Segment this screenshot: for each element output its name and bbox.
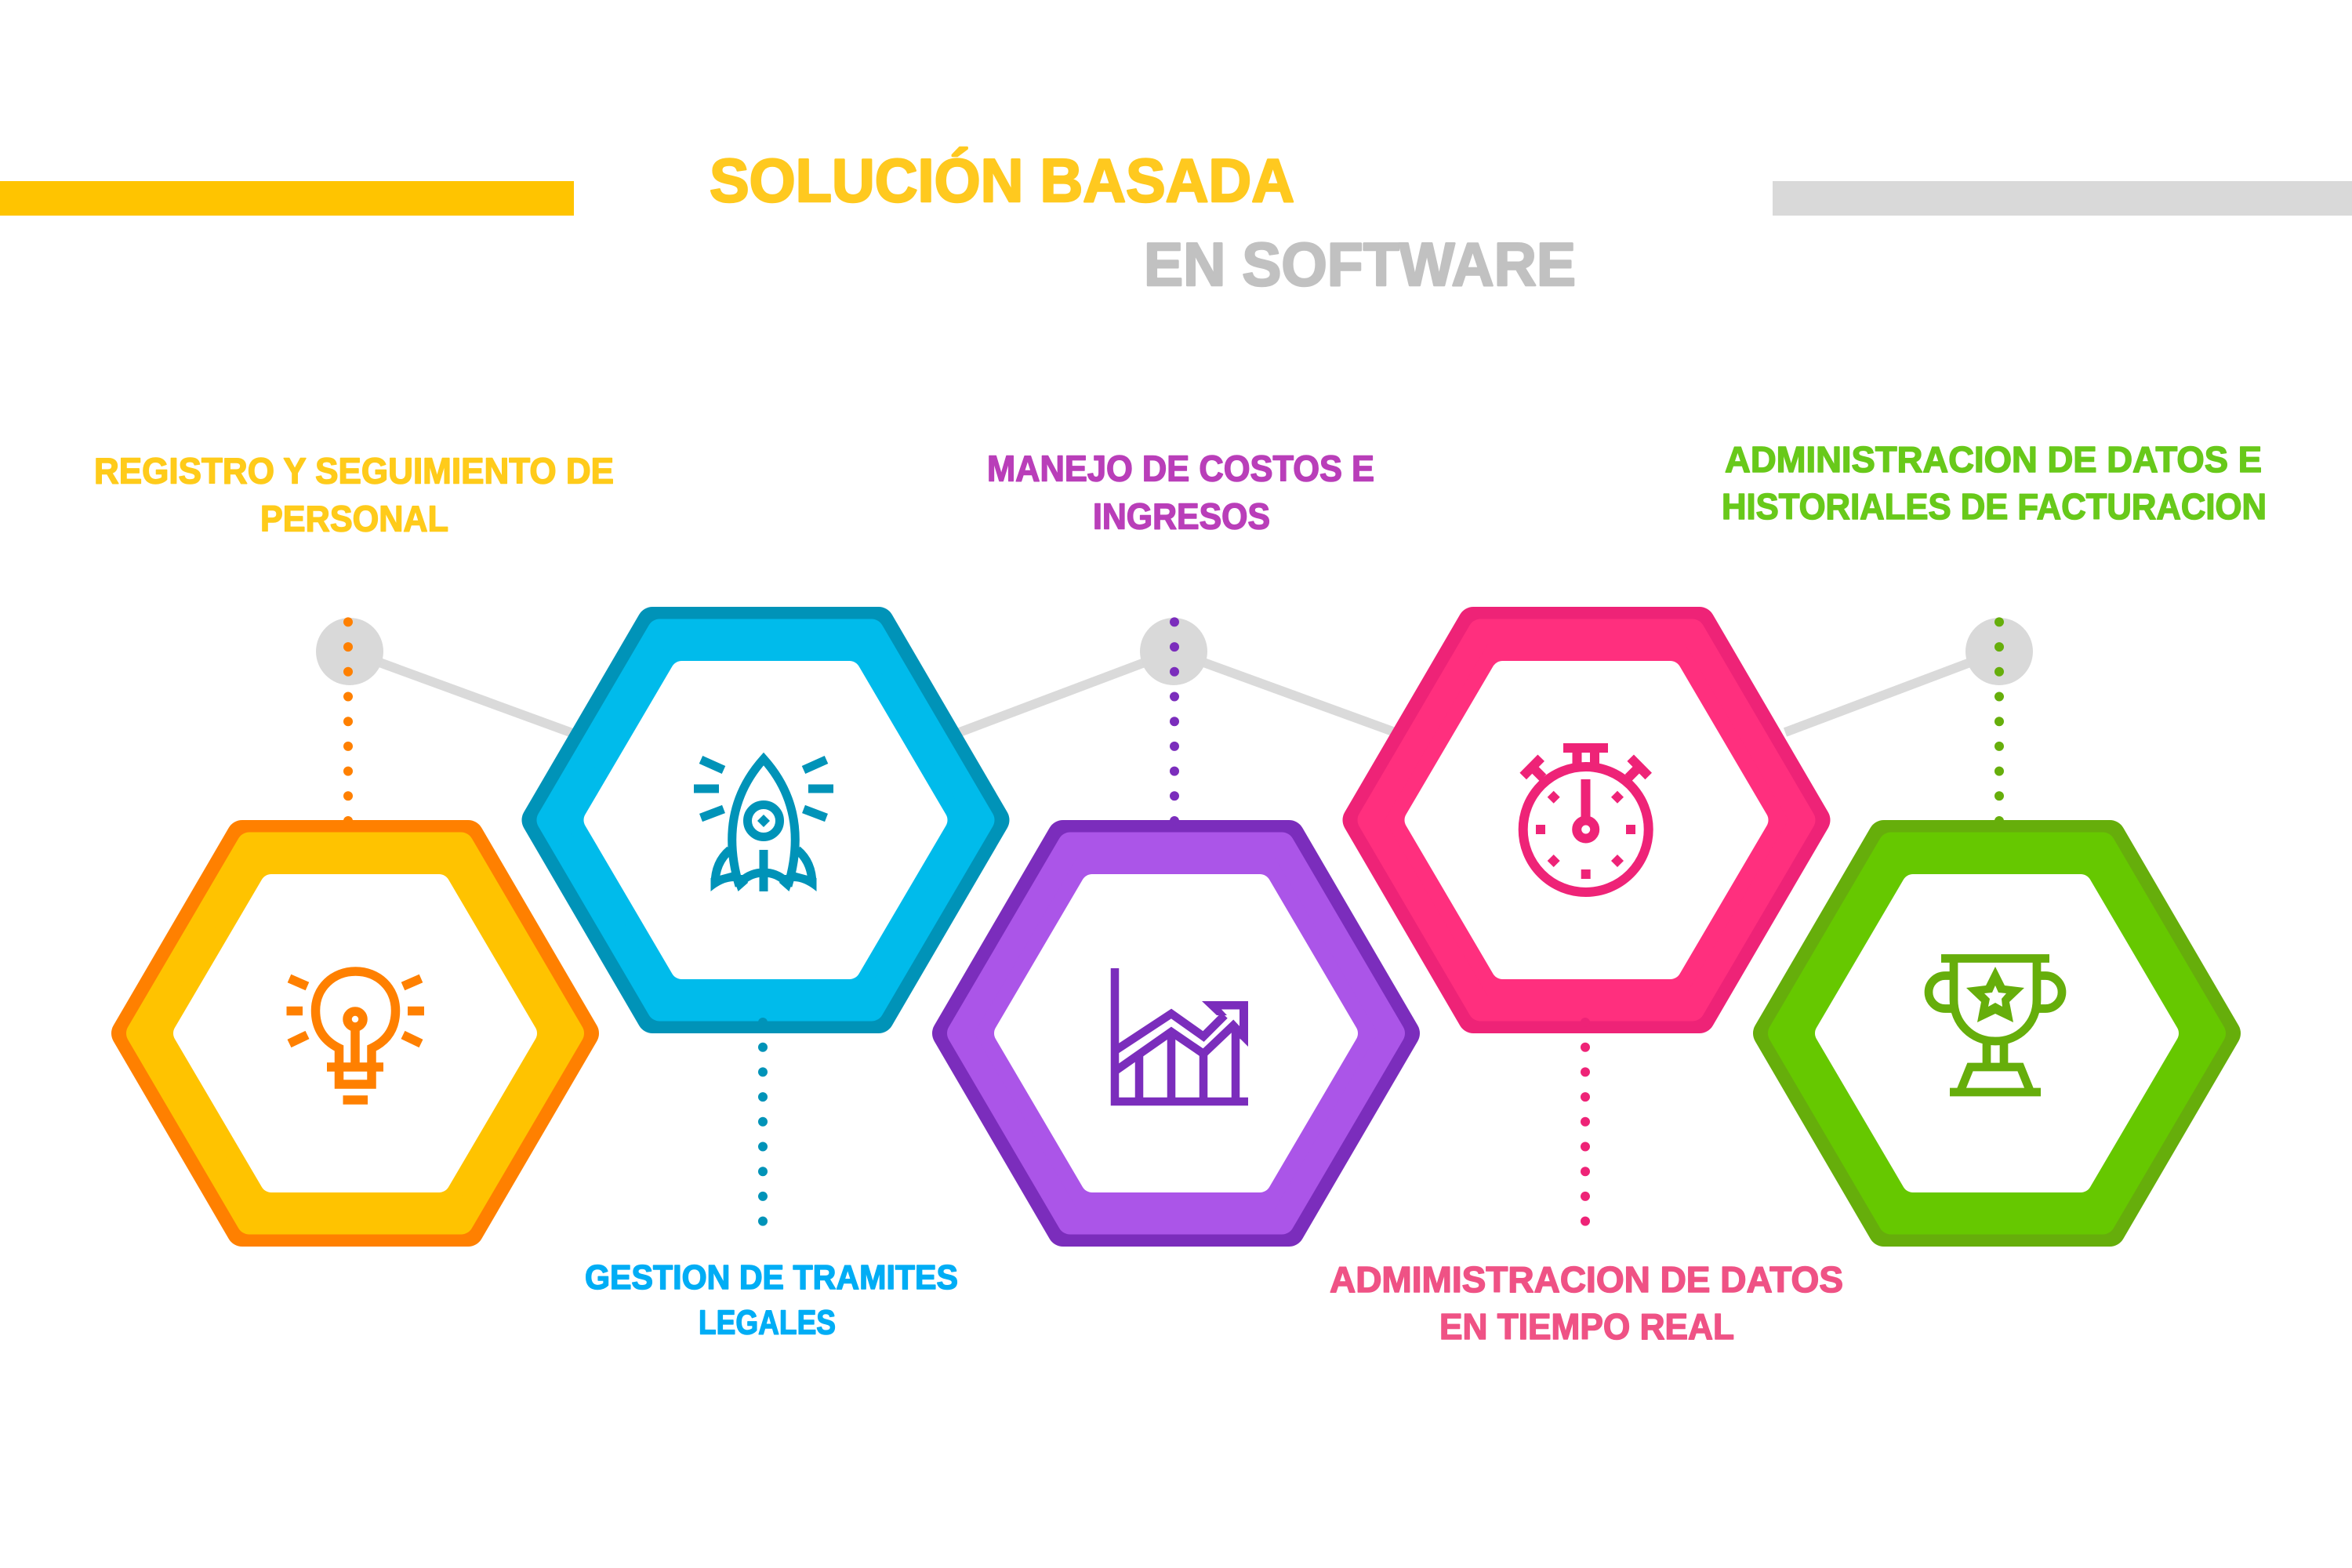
dotted line: blue — [758, 1022, 768, 1222]
dotted line: green — [1994, 619, 2004, 821]
icon: rocket — [694, 759, 833, 891]
label: administracion historiales: HISTORIALES DE FACTURACION — [1722, 486, 2267, 527]
grey connector lines — [350, 652, 1999, 733]
label: gestion — [585, 1258, 958, 1342]
icon: stopwatch — [1523, 748, 1649, 892]
label: administracion tiempo real: ADMIMISTRACION DE DATOS — [1330, 1259, 1843, 1300]
label: gestion: LEGALES — [699, 1303, 836, 1342]
grey node circles — [316, 618, 2033, 685]
title: SOLUCIÓN BASADA — [710, 146, 1294, 215]
dotted line: purple — [1170, 619, 1179, 821]
label: registro: PERSONAL — [260, 499, 448, 539]
label: gestion: GESTION DE TRAMITES — [585, 1258, 958, 1297]
label: administracion historiales — [1722, 439, 2267, 527]
icon: light bulb — [287, 971, 424, 1100]
label: registro — [94, 450, 614, 539]
hexagon: blue — [538, 622, 994, 1018]
hexagon: pink — [1358, 622, 1814, 1018]
label: manejo: INGRESOS — [1093, 495, 1270, 536]
hexagon: yellow — [127, 836, 583, 1231]
left yellow title bar — [0, 181, 574, 216]
icon: growth chart — [1115, 968, 1248, 1102]
label: manejo — [987, 448, 1374, 536]
dotted line: orange — [343, 619, 353, 821]
label: manejo: MANEJO DE COSTOS E — [987, 448, 1374, 489]
label: administracion tiempo real — [1330, 1259, 1843, 1347]
icon: trophy — [1929, 958, 2062, 1092]
label: administracion tiempo real: EN TIEMPO REAL — [1439, 1306, 1734, 1347]
title: EN SOFTWARE — [1144, 230, 1576, 299]
label: registro: REGISTRO Y SEGUIMIENTO DE — [94, 450, 614, 491]
hexagon: green — [1769, 836, 2225, 1231]
dotted line: pink — [1581, 1022, 1590, 1222]
right grey title bar — [1773, 181, 2352, 216]
title — [710, 146, 1576, 299]
label: administracion historiales: ADMINISTRACION DE DATOS E — [1725, 439, 2262, 480]
hexagon: purple — [948, 836, 1404, 1231]
